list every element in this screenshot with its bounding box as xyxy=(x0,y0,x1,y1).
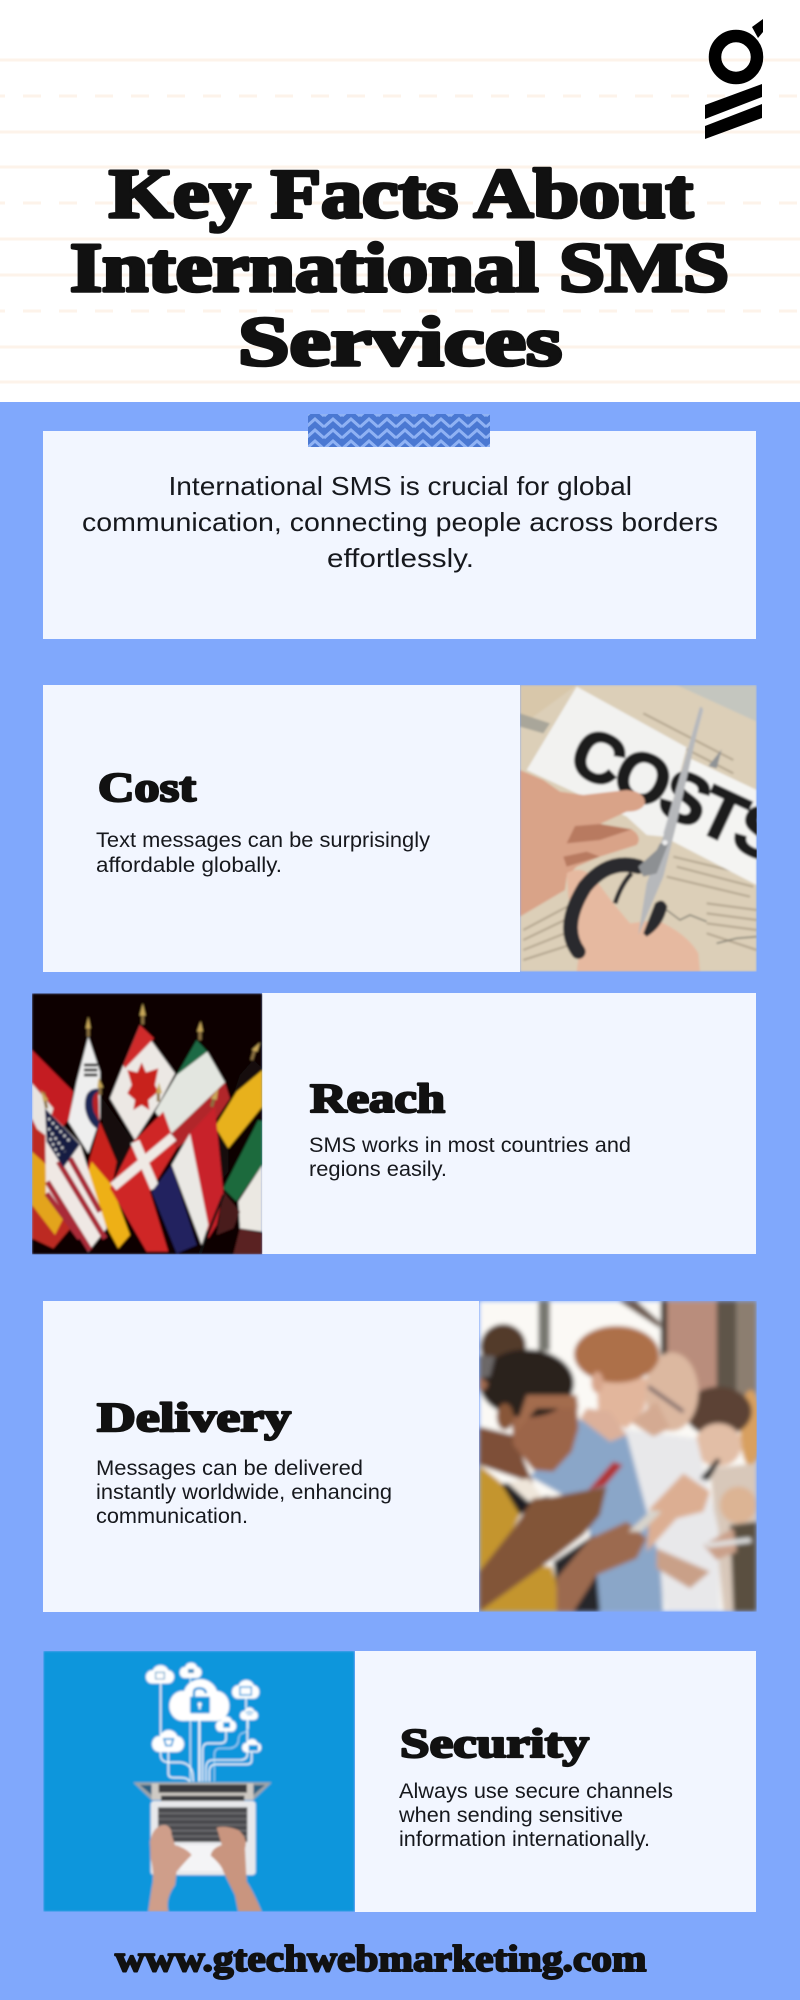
image: hands on laptop with cloud security icons xyxy=(43,1651,355,1912)
image: international flags xyxy=(32,993,262,1254)
text: cost body: Text messages can be surprisingly xyxy=(96,828,430,852)
text: delivery body: communication. xyxy=(96,1504,248,1528)
image: young people using phones xyxy=(479,1301,761,1612)
text: intro paragraph: effortlessly. xyxy=(327,543,474,573)
heading: cost: Cost xyxy=(98,764,196,810)
text: security body xyxy=(398,1779,673,1851)
panel: cost xyxy=(43,685,520,972)
icon: brand logo xyxy=(705,19,763,139)
heading: security: Security xyxy=(400,1720,590,1766)
text: security body: Always use secure channels xyxy=(399,1779,673,1803)
panel: delivery xyxy=(43,1301,479,1612)
background: white header xyxy=(0,0,800,402)
text: intro paragraph: International SMS is crucial for global xyxy=(168,471,632,501)
panel: reach xyxy=(262,993,756,1254)
background: blue body xyxy=(0,402,800,2000)
image: hands cutting the word costs with scissors: COSTS xyxy=(559,712,798,878)
text: security body: information internationally. xyxy=(399,1827,650,1851)
title xyxy=(70,156,729,381)
image: hands cutting the word costs with scissors xyxy=(520,685,757,972)
text: delivery body: Messages can be delivered xyxy=(96,1456,363,1480)
footer: website url: www.gtechwebmarketing.com xyxy=(115,1939,647,1980)
text: cost body xyxy=(96,828,430,877)
text: reach body: SMS works in most countries and xyxy=(309,1133,631,1157)
panel: security xyxy=(355,1651,756,1912)
title: Key Facts About xyxy=(109,156,693,233)
text: intro paragraph xyxy=(82,471,718,573)
text: security body: when sending sensitive xyxy=(398,1803,623,1827)
title: International SMS xyxy=(70,230,729,307)
text: cost body: affordable globally. xyxy=(96,853,282,877)
heading: reach: Reach xyxy=(310,1075,445,1121)
heading: delivery: Delivery xyxy=(97,1394,292,1440)
title: Services xyxy=(238,304,562,381)
text: intro paragraph: communication, connecting people across borders xyxy=(82,507,718,537)
text: reach body: regions easily. xyxy=(309,1157,447,1181)
panel: intro xyxy=(43,431,756,639)
decoration: chevron tape xyxy=(308,414,490,447)
text: reach body xyxy=(309,1133,631,1181)
text: delivery body: instantly worldwide, enhancing xyxy=(96,1480,392,1504)
text: delivery body xyxy=(96,1456,392,1528)
